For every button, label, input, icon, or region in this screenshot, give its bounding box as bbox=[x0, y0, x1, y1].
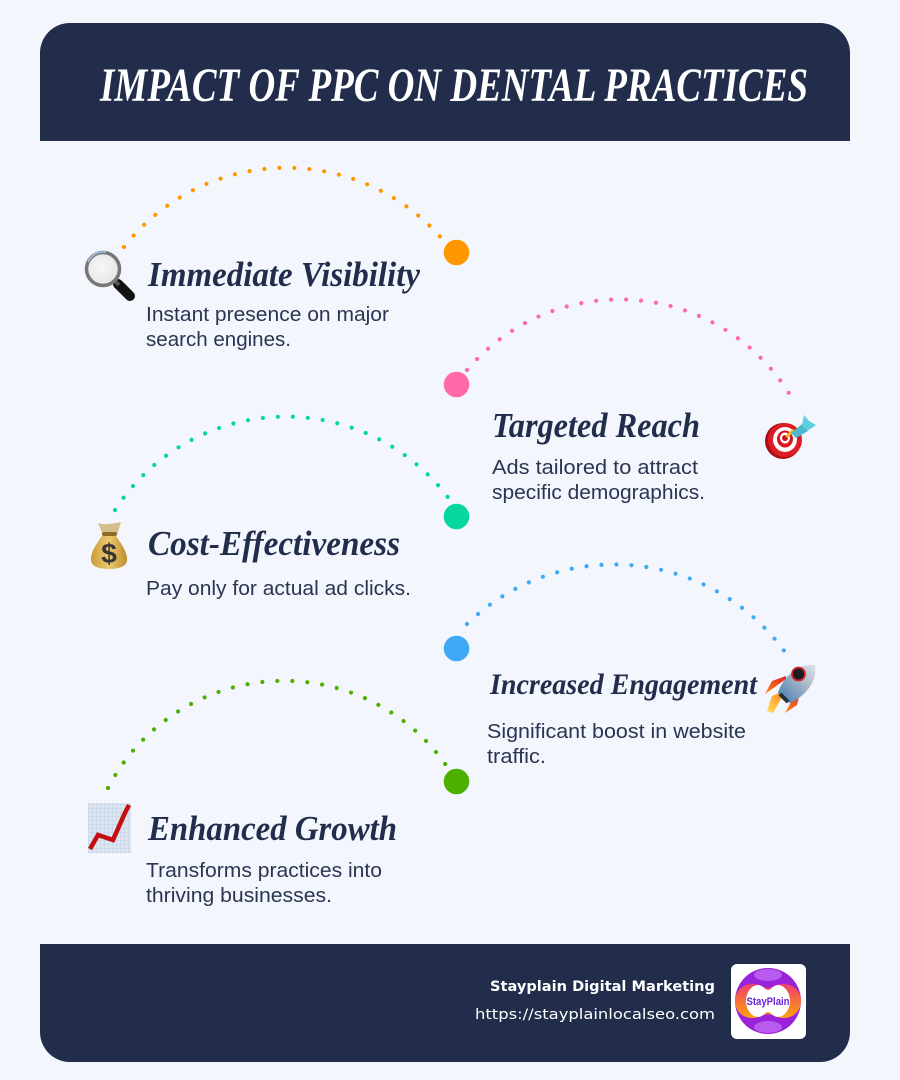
item: Targeted Reach bbox=[444, 299, 816, 504]
dotted arc teal bbox=[115, 417, 452, 510]
description: traffic. bbox=[487, 746, 546, 768]
description: thriving businesses. bbox=[146, 885, 332, 907]
icon: money bag: $ bbox=[101, 538, 117, 569]
node orange bbox=[444, 240, 469, 265]
icon: money bag bbox=[91, 522, 127, 569]
footer banner bbox=[40, 944, 850, 1062]
description: specific demographics. bbox=[492, 482, 705, 504]
description: Pay only for actual ad clicks. bbox=[146, 578, 411, 600]
dotted arc blue bbox=[467, 564, 785, 652]
description bbox=[487, 721, 746, 768]
dotted arc orange bbox=[124, 168, 443, 247]
heading: Immediate Visibility bbox=[147, 255, 420, 294]
website url: https://stayplainlocalseo.com bbox=[475, 1007, 715, 1023]
node green bbox=[444, 769, 469, 794]
description: search engines. bbox=[146, 329, 291, 351]
description bbox=[146, 860, 382, 907]
heading: Cost-Effectiveness bbox=[148, 524, 400, 563]
item: Immediate Visibility bbox=[86, 168, 469, 351]
node teal bbox=[444, 504, 469, 529]
item: Increased Engagement bbox=[444, 564, 815, 768]
node blue bbox=[444, 636, 469, 661]
company name: Stayplain Digital Marketing bbox=[490, 979, 715, 995]
description: Instant presence on major bbox=[146, 304, 389, 326]
icon: rocket bbox=[765, 665, 815, 713]
description: Significant boost in website bbox=[487, 721, 746, 743]
icon: magnifying glass bbox=[86, 252, 130, 296]
heading: Targeted Reach bbox=[492, 406, 700, 445]
icon: rising chart bbox=[88, 803, 131, 853]
item: Cost-Effectiveness bbox=[91, 417, 469, 600]
header banner bbox=[40, 23, 850, 141]
heading: Increased Engagement bbox=[489, 668, 759, 701]
dotted arc green bbox=[108, 681, 448, 788]
icon: target with dart bbox=[765, 415, 816, 459]
description bbox=[492, 457, 705, 504]
logo bbox=[731, 964, 806, 1039]
dotted arc pink bbox=[467, 299, 793, 400]
description: Transforms practices into bbox=[146, 860, 382, 882]
item: Enhanced Growth bbox=[88, 681, 469, 907]
heading: Enhanced Growth bbox=[147, 809, 397, 848]
description bbox=[146, 304, 389, 351]
logo: StayPlain bbox=[746, 996, 790, 1008]
description: Ads tailored to attract bbox=[492, 457, 698, 479]
node pink bbox=[444, 372, 469, 397]
